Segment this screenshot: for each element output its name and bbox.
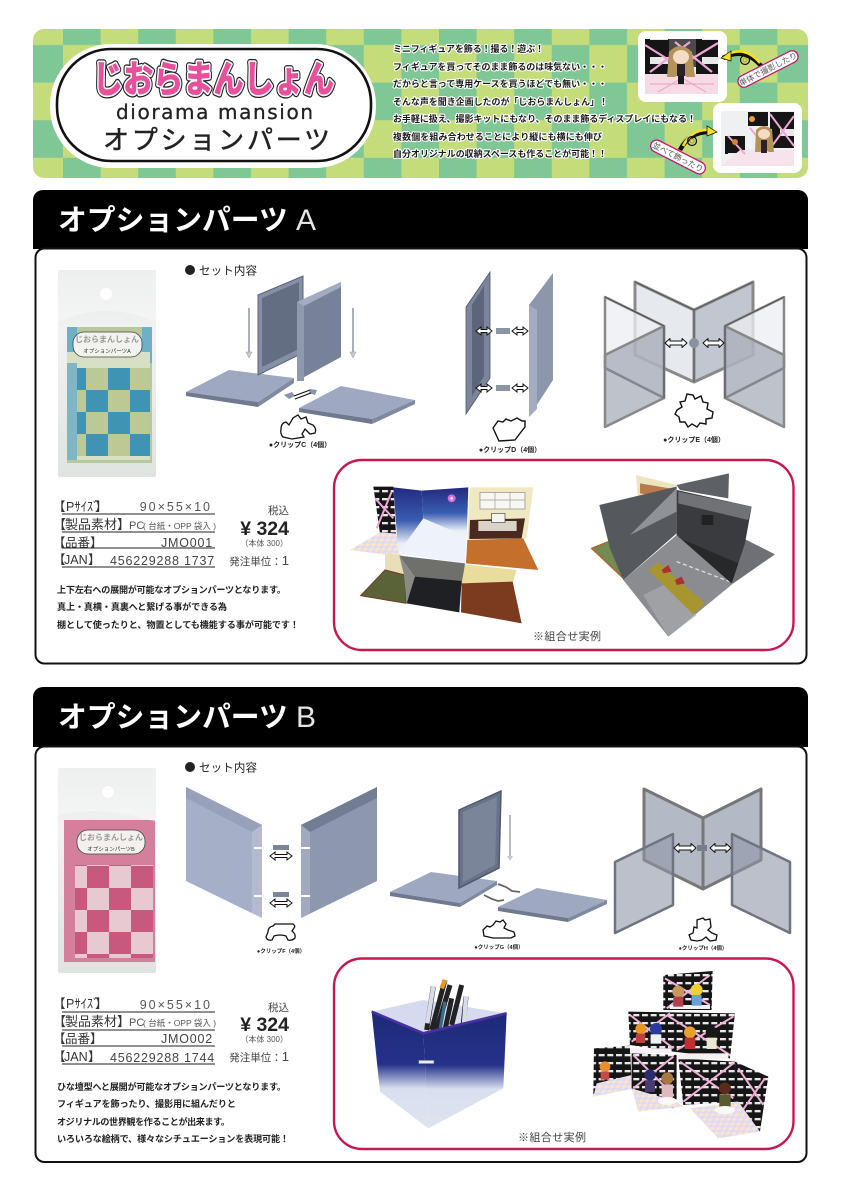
description A: 真上・真横・真裏へと繋げる事ができる為 <box>57 601 227 612</box>
spec table A: 製品素材 <box>65 517 117 532</box>
banner checker background <box>33 29 808 178</box>
spec table B: 品番 <box>65 1032 91 1046</box>
spec table B: 】 <box>88 1050 101 1064</box>
banner intro text: 自分オリジナルの収納スペースも作ることが可能！！ <box>393 148 607 159</box>
diagram: clip G assembly <box>390 791 607 922</box>
price B: 税込 <box>268 1001 289 1014</box>
spec table A <box>53 500 216 568</box>
diagram: clip E assembly <box>605 282 784 427</box>
logo latin name: diorama mansion <box>116 100 313 124</box>
icon: clip C <box>281 415 316 439</box>
spec table A: 】 <box>117 517 130 532</box>
spec table A: Pｻｲｽﾞ <box>66 500 99 514</box>
caption: clip D: ●クリップD（4個） <box>479 445 541 454</box>
caption: clip C: ●クリップC（4個） <box>269 440 331 449</box>
banner intro text: だからと言って専用ケースを買うほどでも無い・・・ <box>393 78 607 89</box>
spec table B: 】 <box>95 997 108 1011</box>
spec table A: 90×55×10 <box>140 500 212 514</box>
spec table B: 【 <box>53 1032 66 1046</box>
examples frame A <box>334 460 794 650</box>
price A <box>229 504 289 568</box>
label: single shot: 単体で撮影したり <box>737 50 799 88</box>
icon: clip F <box>266 924 295 940</box>
set contents heading A: セット内容 <box>199 264 258 278</box>
label: group display: 並べて飾ったり <box>651 140 705 174</box>
panel: option parts A <box>33 190 808 664</box>
logo plate <box>50 44 376 168</box>
caption: clip H: ●クリップH（4個） <box>679 944 727 952</box>
spec table A: JAN <box>64 553 88 567</box>
heading bar B <box>33 687 808 747</box>
logo title: じおらまんしょん <box>93 59 334 100</box>
spec table A: 456229288 1737 <box>110 554 215 568</box>
product package A <box>58 270 156 477</box>
caption: examples B: ※組合せ実例 <box>518 1130 586 1144</box>
spec table B: 【 <box>53 1050 66 1064</box>
diagram: clip C assembly <box>186 276 415 424</box>
price A: 税込 <box>268 504 289 517</box>
product package B <box>58 768 156 973</box>
description B: いろいろな絵柄で、様々なシチュエーションを表現可能！ <box>57 1133 289 1144</box>
set contents heading B: セット内容 <box>199 760 258 774</box>
banner intro text <box>393 43 696 159</box>
product package B: オプションパーツB <box>87 846 135 853</box>
spec table A: 】 <box>90 536 103 550</box>
price A: ¥ 324 <box>240 518 289 540</box>
caption: clip E: ●クリップE（4個） <box>663 435 725 444</box>
price A: （本体 300） <box>240 538 288 548</box>
heading bar A: A <box>296 204 316 237</box>
icon: clip H <box>689 918 717 941</box>
price B: 発注単位：1 <box>229 1049 289 1064</box>
product package B: じおらまんしょん <box>79 833 143 842</box>
banner intro text: ミニフィギュアを飾る！撮る！遊ぶ！ <box>393 43 544 54</box>
examples frame B <box>334 958 794 1149</box>
photo: cross wall combination <box>592 473 775 637</box>
photo: single figure <box>638 31 727 102</box>
spec table A: PC <box>129 520 144 532</box>
spec table A: 品番 <box>65 536 91 550</box>
description A: 棚として使ったりと、物置としても機能する事が可能です！ <box>57 619 299 630</box>
spec table A: 【 <box>53 536 66 550</box>
price B <box>229 1001 289 1064</box>
icon: clip D <box>493 418 525 441</box>
spec table A: 】 <box>95 500 108 514</box>
set contents heading A <box>185 264 258 278</box>
spec table A: ( 台紙・OPP 袋入 ) <box>143 521 216 531</box>
banner intro text: そんな声を聞き企画したのが「じおらまんしょん」！ <box>393 96 608 107</box>
description A: 上下左右への展開が可能なオプションパーツとなります。 <box>57 584 286 595</box>
product package A: オプションパーツA <box>83 348 131 355</box>
logo title: じおらまんしょん <box>93 59 334 100</box>
diagram: clip H assembly <box>615 789 790 933</box>
icon: clip E <box>675 394 713 427</box>
banner intro text: 複数個を組み合わせることにより縦にも横にも伸び <box>393 131 602 142</box>
spec table B: JAN <box>64 1050 88 1064</box>
banner intro text: フィギュアを買ってそのまま飾るのは味気ない・・・ <box>393 61 607 72</box>
spec table B: ( 台紙・OPP 袋入 ) <box>143 1018 216 1028</box>
banner intro text: お手軽に扱え、撮影キットにもなり、そのまま飾るディスプレイにもなる！ <box>393 113 696 124</box>
diagram: clip D assembly <box>466 272 553 417</box>
description B <box>57 1081 289 1144</box>
spec table A: 【 <box>53 517 66 532</box>
logo subtitle: オプションパーツ <box>103 125 330 155</box>
description A <box>57 584 299 630</box>
heading bar A: オプションパーツ <box>58 205 288 237</box>
description B: オジリナルの世界観を作ることが出来ます。 <box>57 1116 230 1127</box>
description B: フィギュアを飾ったり、撮影用に組んだりと <box>57 1098 236 1109</box>
spec table B: 】 <box>117 1014 130 1029</box>
description B: ひな壇型へと展開が可能なオプションパーツとなります。 <box>57 1081 286 1092</box>
spec table A: 【 <box>53 553 66 567</box>
panel frame A <box>36 248 806 664</box>
caption: clip G: ●クリップG（4個） <box>474 943 524 951</box>
heading bar A <box>33 190 808 249</box>
spec table A: 】 <box>88 553 101 567</box>
spec table B: 456229288 1744 <box>110 1051 215 1065</box>
icon: clip G <box>483 920 515 938</box>
diagram: clip F assembly <box>186 787 377 918</box>
spec table B <box>53 997 216 1065</box>
spec table B: 【 <box>53 997 66 1011</box>
price A: 発注単位：1 <box>229 553 289 568</box>
spec table B: 】 <box>90 1032 103 1046</box>
spec table B: 90×55×10 <box>140 998 212 1012</box>
price B: ¥ 324 <box>240 1014 289 1036</box>
banner <box>33 29 808 178</box>
photo: multiple figures <box>713 103 802 173</box>
photo: pen holder box <box>372 980 507 1128</box>
caption: examples A: ※組合せ実例 <box>533 629 601 643</box>
heading bar B: B <box>296 701 316 734</box>
product package A: じおらまんしょん <box>75 335 139 344</box>
spec table B: JMO002 <box>161 1032 213 1046</box>
panel frame B <box>36 746 806 1162</box>
panel: option parts B <box>33 687 808 1162</box>
photo: figure stage <box>593 971 768 1138</box>
caption: clip F: ●クリップF（4個） <box>257 947 305 955</box>
photo: three room combination <box>350 487 538 623</box>
heading bar B: オプションパーツ <box>58 702 288 734</box>
spec table A: JMO001 <box>161 536 213 550</box>
spec table B: Pｻｲｽﾞ <box>66 997 99 1011</box>
price B: （本体 300） <box>240 1034 288 1044</box>
spec table B: 製品素材 <box>65 1014 117 1029</box>
arrow: to group photo <box>680 126 717 150</box>
spec table A: 【 <box>53 500 66 514</box>
set contents heading B <box>185 760 258 774</box>
arrow: to single photo <box>721 51 762 67</box>
spec table B: PC <box>129 1017 144 1029</box>
logo title: じおらまんしょん <box>93 59 334 100</box>
spec table B: 【 <box>53 1014 66 1029</box>
